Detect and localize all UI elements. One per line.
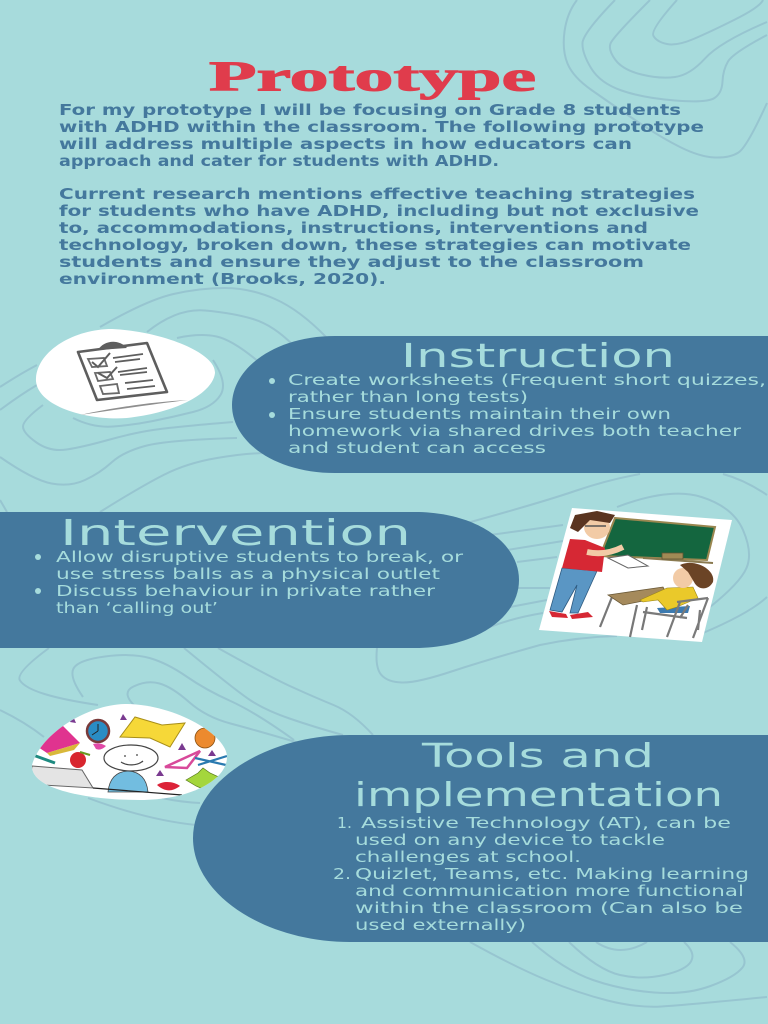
teacher [550,568,597,613]
bullet list: intervention: than ‘calling out’ [56,599,218,617]
text block: introduction: approach and cater for students with ADHD. [59,152,499,170]
bullet list: instruction: Ensure students maintain their own [288,405,671,423]
student [600,597,647,637]
text block: research summary: technology, broken down, these strategies can motivate [59,236,691,254]
heading: tools and implementation [354,736,723,814]
text block: research summary: students and ensure they adjust to the classroom [59,253,644,271]
text block: research summary: to, accommodations, instructions, interventions and [59,219,648,237]
numbered list: tools: within the classroom (Can also be [355,899,743,917]
title: Prototype [209,54,536,100]
bullet list: instruction: rather than long tests) [288,388,528,406]
chalkboard [600,518,715,560]
bullet list: instruction: and student can access [288,439,546,457]
text block: introduction [59,101,704,170]
text block: introduction: will address multiple aspects in how educators can [59,135,632,153]
panel: instruction [232,336,768,473]
illustration: school doodles in white blob [30,704,227,800]
illustration: teacher and student [539,508,732,642]
numbered list: tools [333,814,749,934]
numbered list: tools: used externally) [355,916,526,934]
text block: research summary: Current research mentions effective teaching strategies [59,185,695,203]
heading: instruction: Instruction [401,336,675,375]
numbered list: tools: and communication more functional [355,882,744,900]
numbered list: tools: Assistive Technology (AT), can be [361,814,731,832]
text block: introduction: with ADHD within the classroom. The following prototype [59,118,704,136]
bullet list: instruction: Create worksheets (Frequent short quizzes, [288,371,766,389]
heading: tools and implementation: implementation [354,775,723,814]
heading: intervention: Intervention [60,513,411,554]
panel: intervention [0,512,519,648]
panel: tools and implementation [193,735,768,942]
bullet list: intervention: Discuss behaviour in private rather [56,582,436,600]
icon: clipboard checklist in white blob [36,329,215,418]
heading: tools and implementation: Tools and [420,736,654,775]
numbered list: tools: used on any device to tackle [355,831,665,849]
text block: research summary [59,185,699,288]
bullet list: intervention: Allow disruptive students to break, or [56,548,464,566]
numbered list: tools: 2. [333,865,351,883]
text block: introduction: For my prototype I will be focusing on Grade 8 students [59,101,681,119]
numbered list: tools: challenges at school. [355,848,581,866]
bullet list: intervention: use stress balls as a physical outlet [56,565,440,583]
numbered list: tools: 1. [337,814,352,832]
text block: research summary: for students who have ADHD, including but not exclusive [59,202,699,220]
bullet list: instruction: homework via shared drives both teacher [288,422,742,440]
text block: research summary: environment (Brooks, 2020). [59,270,386,288]
bullet list: intervention [35,548,464,617]
bullet list: instruction [269,371,766,457]
numbered list: tools: Quizlet, Teams, etc. Making learning [355,865,749,883]
